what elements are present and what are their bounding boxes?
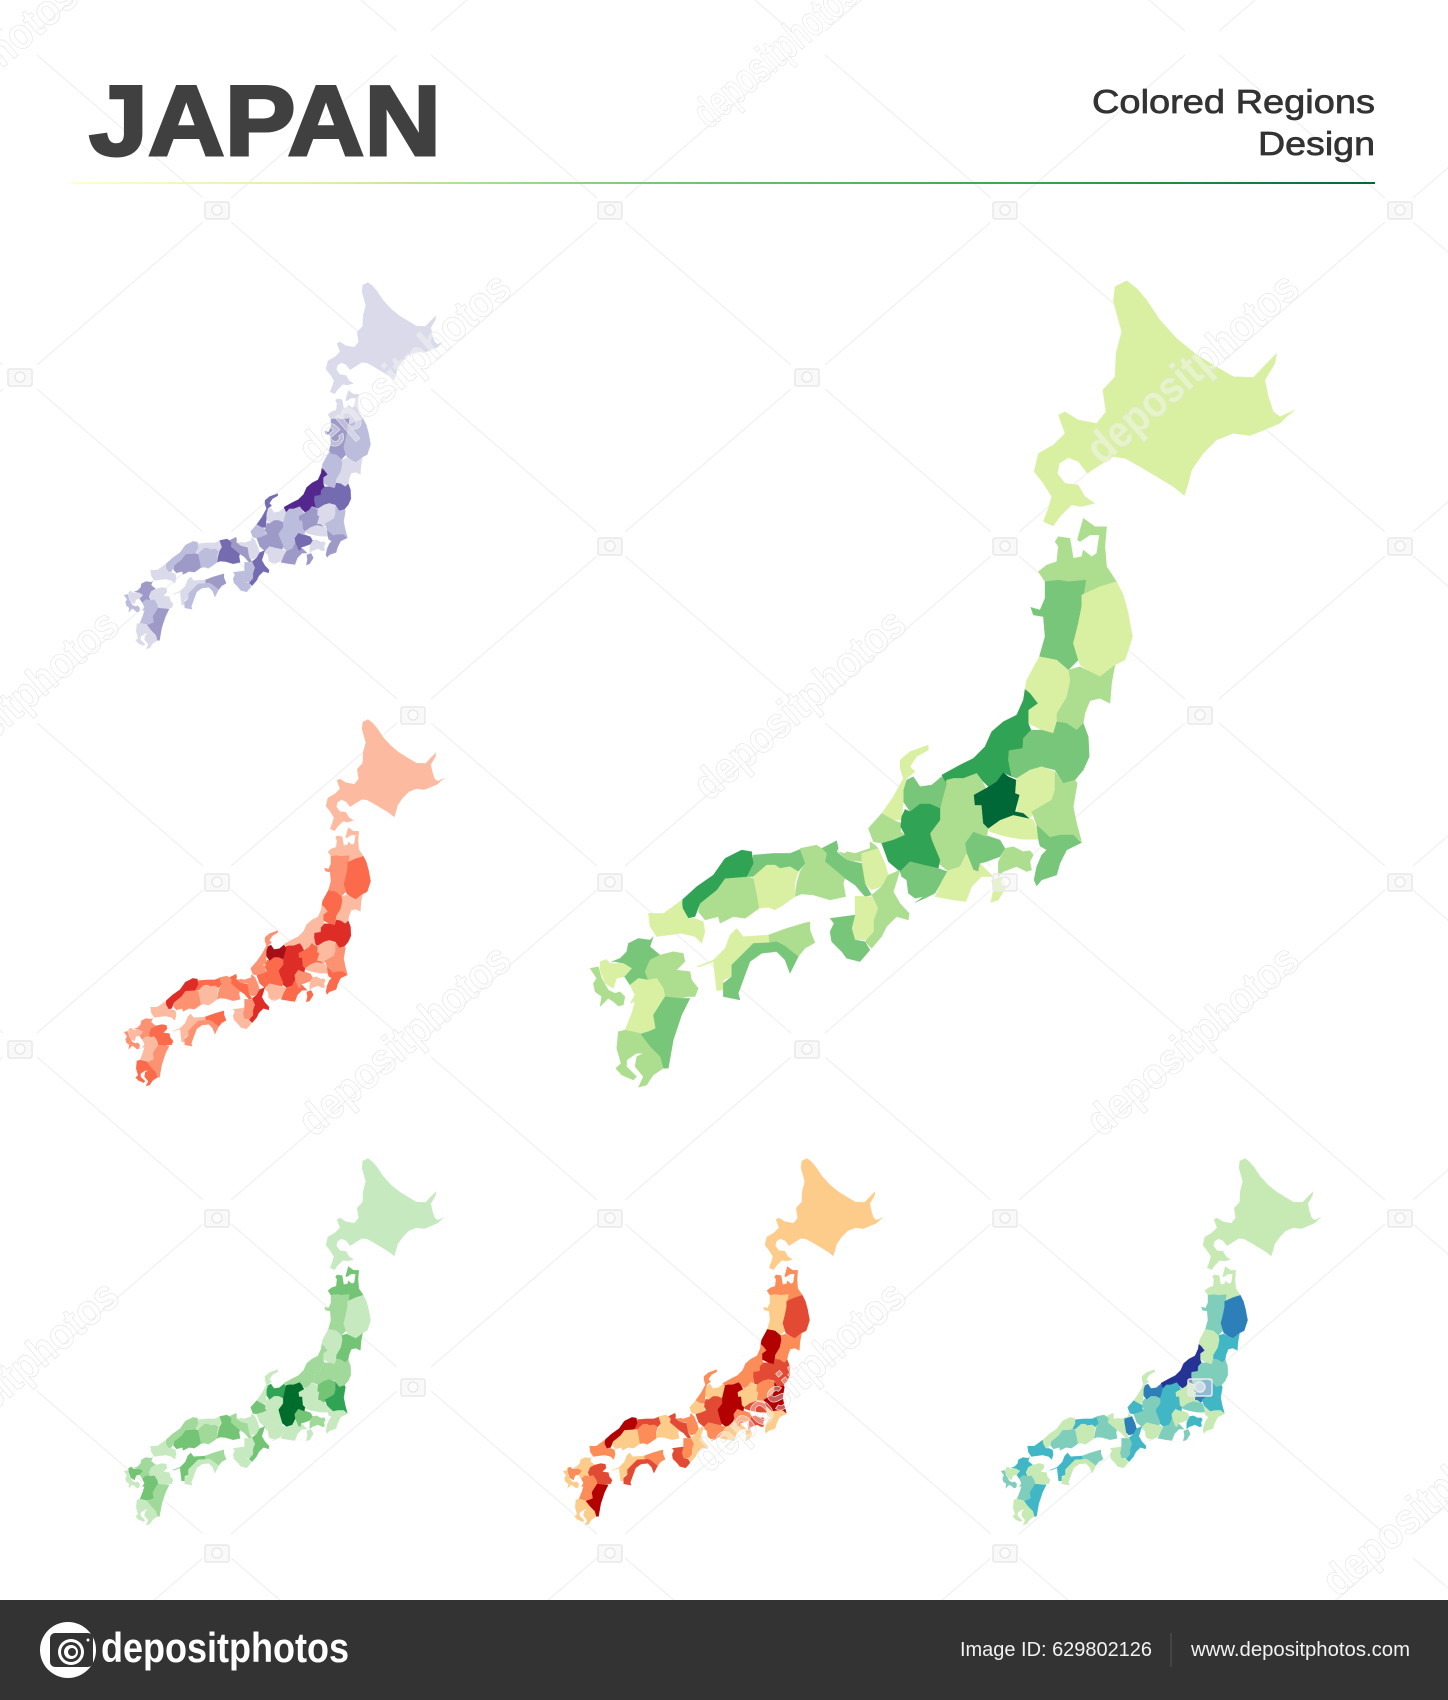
image id: Image ID: 629802126 <box>960 1639 1152 1661</box>
region: Hokkaido <box>1034 281 1295 526</box>
map: small green <box>124 1158 445 1525</box>
watermark: depositphotos <box>1076 935 1309 1146</box>
title: JAPAN <box>89 65 441 176</box>
map: small blue-green <box>1001 1158 1322 1525</box>
map: large yellow-green <box>590 281 1295 1087</box>
region: Gunma highlight <box>974 773 1029 828</box>
icon: camera logo <box>40 1622 96 1678</box>
region: Niigata <box>942 689 1038 787</box>
footer bar <box>0 1600 1448 1700</box>
website url: www.depositphotos.com <box>1190 1639 1410 1661</box>
watermark: depositphotos <box>1076 263 1309 474</box>
watermark: depositphotos <box>288 263 521 474</box>
subtitle: Design <box>1258 125 1375 162</box>
subtitle <box>1092 83 1375 162</box>
footer logo wordmark: depositphotos <box>101 1624 349 1671</box>
map: small orange-red <box>563 1158 884 1525</box>
map: small red <box>124 719 445 1086</box>
subtitle: Colored Regions <box>1092 83 1375 120</box>
watermark: depositphotos <box>288 935 521 1146</box>
watermark: depositphotos <box>683 599 916 810</box>
map: small purple <box>124 282 445 649</box>
watermark: depositphotos <box>683 1271 916 1482</box>
